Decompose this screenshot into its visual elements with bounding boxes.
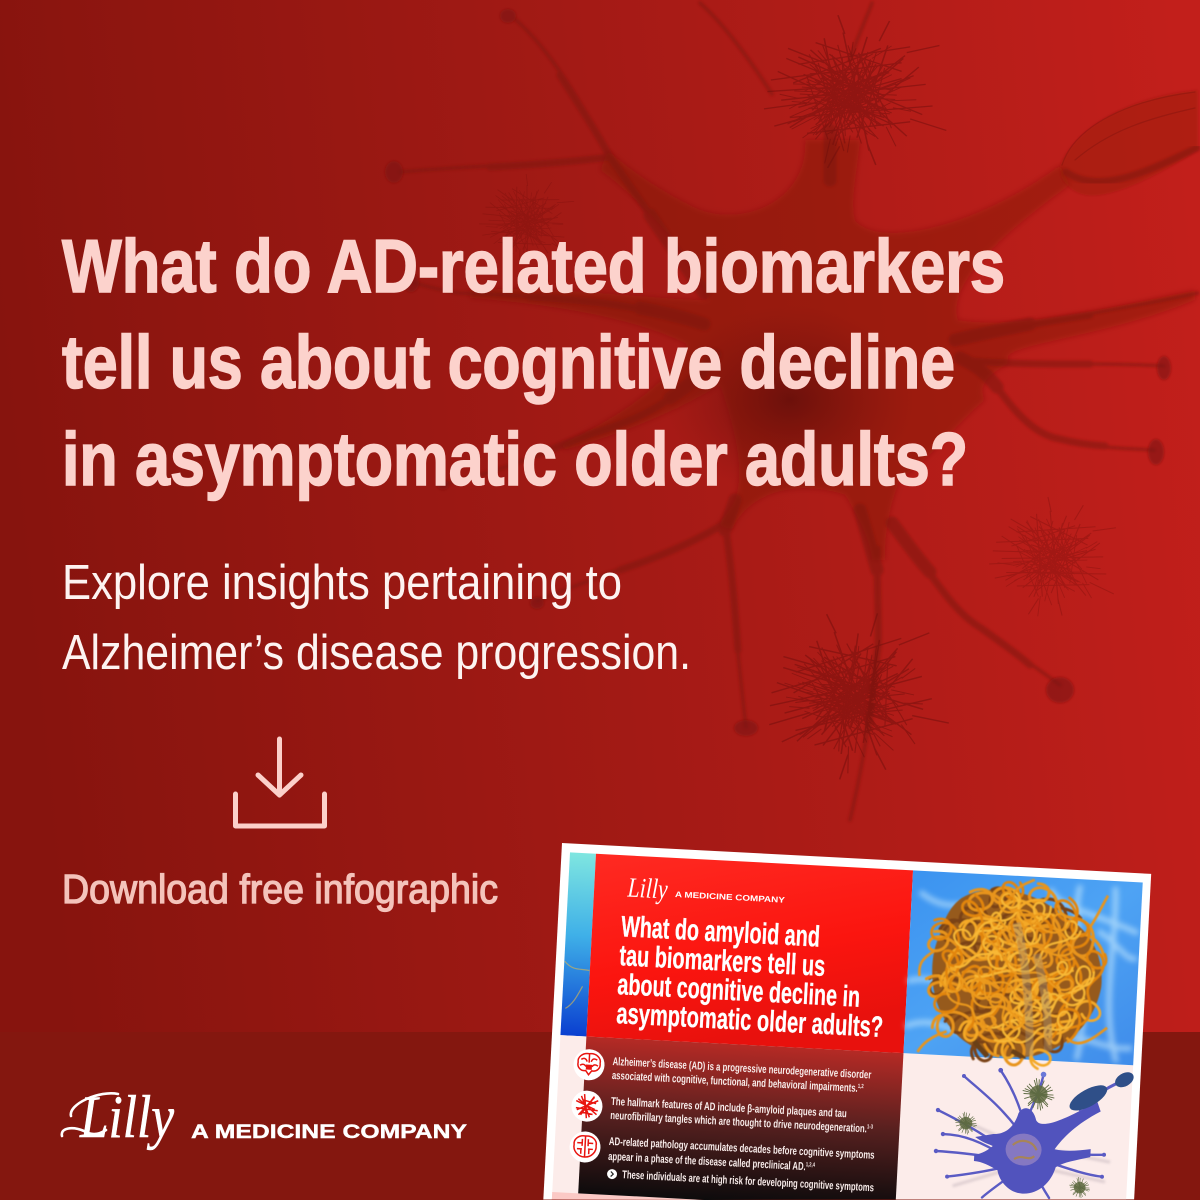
axon pod bbox=[1060, 90, 1198, 196]
amyloid plaque image bbox=[885, 844, 1144, 1101]
heading: What do AD-related biomarkers bbox=[62, 224, 1005, 308]
preview heading: about cognitive decline in bbox=[617, 968, 861, 1014]
neuron soma bbox=[972, 1095, 1101, 1197]
subheading: Explore insights pertaining to bbox=[62, 556, 622, 610]
preview heading: tau biomarkers tell us bbox=[619, 939, 826, 983]
pink footer strip bbox=[552, 1192, 705, 1200]
neuron cell body bbox=[470, 140, 1195, 560]
sheet paper bbox=[543, 843, 1151, 1200]
amyloid tangles in the background bbox=[473, 15, 1123, 788]
neuron branches bbox=[400, 3, 1198, 820]
icon: brain with cross bbox=[573, 1048, 605, 1081]
preview logo: A MEDICINE COMPANY bbox=[675, 890, 786, 905]
preview heading bbox=[615, 910, 888, 1044]
preview logo: Lilly bbox=[626, 872, 669, 906]
neuron shadow bbox=[953, 1122, 1112, 1194]
logo: Lilly, a medicine company bbox=[62, 1084, 467, 1150]
neuron image bbox=[931, 1059, 1137, 1200]
icon: tangle bbox=[571, 1090, 603, 1122]
blue strip bbox=[560, 852, 596, 1037]
icon: brain bbox=[569, 1131, 601, 1163]
neuron end bulbs bbox=[932, 1065, 1110, 1187]
subheading bbox=[62, 556, 691, 680]
heading: tell us about cognitive decline bbox=[62, 320, 955, 404]
dark text panel: The hallmark features of AD include β-amyloid plaques and tau bbox=[611, 1096, 847, 1120]
call to action: download: Download free infographic bbox=[62, 866, 498, 912]
subheading: Alzheimer’s disease progression. bbox=[62, 626, 691, 680]
dark text panel: 1,2,4 bbox=[806, 1162, 816, 1169]
preview heading: What do amyloid and bbox=[620, 910, 821, 954]
dark text panel: associated with cognitive, functional, and behavioral impairments. bbox=[612, 1070, 965, 1100]
preview heading: asymptomatic older adults? bbox=[616, 997, 884, 1044]
neuron nucleus shade bbox=[665, 305, 915, 495]
dark text panel: 1,2 bbox=[858, 1084, 864, 1090]
dark text panel: AD-related pathology accumulates decades before cognitive symptoms bbox=[609, 1136, 875, 1162]
red title panel bbox=[586, 854, 913, 1053]
dark text panel: neurofibrillary tangles which are thought to drive neurodegeneration. bbox=[610, 1110, 978, 1141]
icon: download arrow bbox=[236, 739, 324, 826]
amyloid tufts bbox=[951, 1074, 1096, 1198]
bullet chevron bbox=[607, 1169, 617, 1179]
bottom band bbox=[0, 1032, 1200, 1200]
neuron dendrite end bulbs bbox=[385, 9, 1171, 736]
dark text panel: 1-3 bbox=[867, 1124, 874, 1131]
dark text panel bbox=[578, 1037, 903, 1200]
heading bbox=[62, 224, 1005, 501]
pink lower panel bbox=[552, 1035, 1133, 1200]
preview logo bbox=[626, 872, 786, 912]
dark text panel: Alzheimer’s disease (AD) is a progressive neurodegenerative disorder bbox=[612, 1056, 872, 1082]
logo tagline: A MEDICINE COMPANY bbox=[191, 1122, 467, 1143]
infographic preview sheet bbox=[543, 826, 1152, 1200]
heading: in asymptomatic older adults? bbox=[62, 417, 968, 501]
neuron illustration in the background bbox=[385, 3, 1198, 820]
plaque fibres bbox=[885, 844, 1129, 1100]
dark text panel: appear in a phase of the disease called preclinical AD. bbox=[608, 1151, 896, 1178]
neuron axon pods bbox=[1065, 1066, 1137, 1119]
logo wordmark: Lilly bbox=[79, 1084, 174, 1150]
dark text panel: These individuals are at high risk for developing cognitive symptoms bbox=[622, 1169, 874, 1194]
